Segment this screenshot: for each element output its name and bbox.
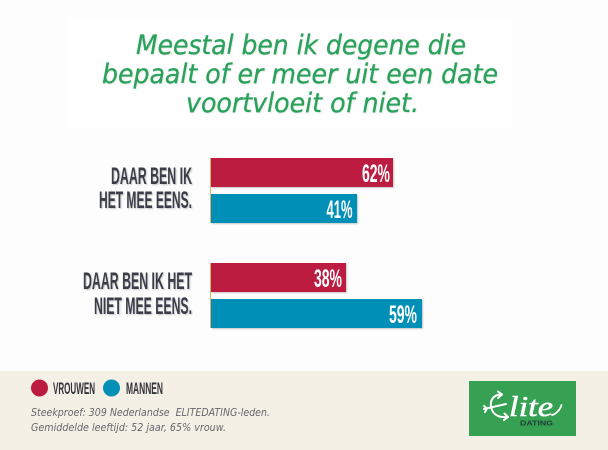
logo: elite dating bbox=[469, 381, 576, 436]
bar: mannen 59%: 59% bbox=[389, 301, 417, 329]
title: Meestal ben ik degene die bbox=[136, 30, 466, 61]
logo wordmark: lite bbox=[509, 391, 553, 423]
label: mee eens: DAAR BEN IK bbox=[111, 163, 192, 190]
bar group: daar ben ik het mee eens: HET MEE EENS. bbox=[99, 187, 192, 214]
title: bepaalt of er meer uit een date bbox=[102, 59, 498, 90]
title: voortvloeit of niet. bbox=[186, 88, 419, 119]
bar: vrouwen 38% bbox=[211, 263, 346, 293]
logo subtitle: DATING bbox=[520, 418, 553, 428]
label: niet mee eens: DAAR BEN IK HET bbox=[83, 268, 192, 295]
title panel bbox=[68, 18, 512, 128]
sample note bbox=[31, 406, 270, 434]
label: niet mee eens bbox=[83, 268, 192, 320]
sample note: Steekproef: 309 Nederlandse ELITEDATING-leden. bbox=[31, 406, 270, 419]
bar: mannen 41% bbox=[211, 194, 357, 224]
bar: vrouwen 38%: 38% bbox=[314, 265, 342, 293]
legend: VROUWEN bbox=[53, 379, 95, 398]
bar: vrouwen 62%: 62% bbox=[362, 160, 390, 188]
title bbox=[102, 30, 498, 119]
bar group: daar ben ik het niet mee eens bbox=[83, 263, 422, 329]
bar: mannen 59% bbox=[211, 299, 422, 329]
sample note: Gemiddelde leeftijd: 52 jaar, 65% vrouw. bbox=[31, 421, 226, 434]
legend bbox=[31, 379, 163, 398]
icon: arrows forming E bbox=[484, 392, 508, 420]
footer panel bbox=[0, 371, 608, 450]
bar: mannen 41%: 41% bbox=[326, 196, 352, 224]
bar group: daar ben ik het niet mee eens: NIET MEE EENS. bbox=[94, 293, 192, 320]
bar: vrouwen 62% bbox=[211, 158, 393, 188]
label: mee eens bbox=[99, 163, 192, 214]
footer panel: MANNEN bbox=[126, 379, 163, 398]
bar group: daar ben ik het mee eens bbox=[99, 158, 393, 224]
